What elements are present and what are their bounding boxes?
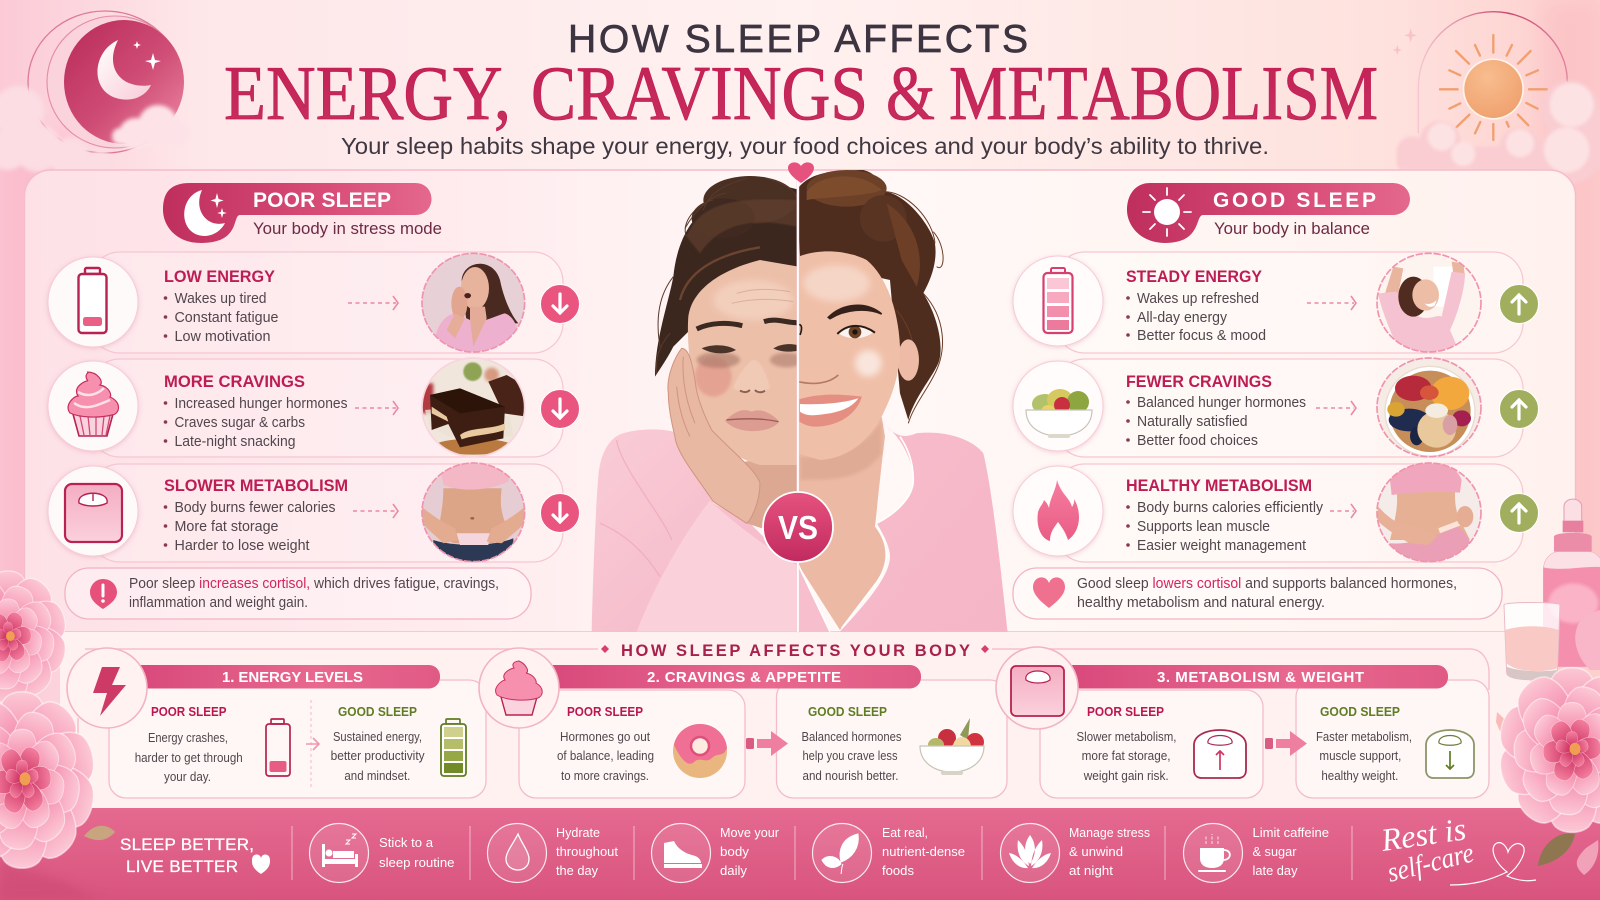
icon: bathroom scale: [65, 484, 122, 542]
card: fewer cravings: FEWER CRAVINGS: [1126, 373, 1272, 391]
tip: hydrate: [488, 824, 618, 882]
right portrait half: good sleep: [797, 170, 1008, 632]
ring: photo border: [1377, 463, 1481, 562]
text: energy poor: [135, 731, 243, 784]
list: more cravings: Late-night snacking: [174, 434, 296, 450]
photos: good sleep row images: [1373, 250, 1487, 565]
icon: lotus: [1009, 835, 1051, 868]
text: metabolism poor: [1076, 730, 1176, 783]
text: cortisol balance line two: healthy metabolism and natural energy.: [1077, 595, 1325, 611]
label: good sleep: GOOD SLEEP: [1320, 704, 1400, 719]
decoration: left peonies: [0, 570, 115, 900]
card: more cravings: MORE CRAVINGS: [164, 373, 305, 391]
text: energy good: [331, 730, 425, 783]
list: more cravings: [164, 396, 348, 450]
list: low energy: [164, 291, 278, 345]
footer slogan: SLEEP BETTER,: [120, 835, 254, 854]
card: slower metabolism: SLOWER METABOLISM: [164, 477, 348, 495]
panel: main comparison: [24, 170, 1576, 632]
list: low energy: Constant fatigue: [174, 310, 278, 326]
photo: woman yawning: [422, 254, 524, 352]
icon: leaves: [822, 834, 858, 874]
list: fewer cravings: [1126, 395, 1306, 449]
decoration: moon badge with clouds: [28, 11, 191, 153]
subtitle: Your sleep habits shape your energy, your food choices and your body’s ability to thrive.: [341, 133, 1269, 159]
text: cortisol line two: inflammation and weight gain.: [129, 595, 308, 611]
card: fewer cravings: [1013, 359, 1538, 457]
arrow: dashed: [1307, 296, 1356, 310]
label: good sleep: GOOD SLEEP: [808, 704, 887, 719]
icon: low battery small: [266, 719, 290, 776]
tip: move your body: [652, 824, 780, 882]
tip: hydrate: Hydrate: [556, 825, 600, 840]
text: cravings poor: of balance, leading: [557, 749, 654, 763]
text: cravings poor: Hormones go out: [560, 730, 650, 744]
list: healthy metabolism: [1126, 500, 1324, 554]
title: energy, cravings & metabolism: [224, 50, 1378, 136]
arrow: dashed: [353, 504, 398, 518]
decoration: left clouds: [0, 86, 114, 179]
badge: down arrow: [540, 284, 580, 324]
list: low energy: Low motivation: [174, 329, 270, 345]
icon: sun rays: [1440, 35, 1547, 140]
list: slower metabolism: Body burns fewer calories: [174, 500, 336, 516]
ring: photo border: [1377, 253, 1481, 352]
badge: VS: VS: [778, 509, 818, 546]
script: rest is self-care: [1378, 810, 1536, 889]
list: steady energy: [1126, 291, 1266, 344]
arrow: poor to good: [746, 731, 788, 756]
label: poor sleep: POOR SLEEP: [1087, 704, 1164, 719]
badge: up arrow: [1500, 390, 1538, 428]
icon: cupcake in circle: [479, 648, 559, 728]
photo: toned midriff with tape: [1377, 463, 1480, 562]
callout: cortisol decreases: [1013, 568, 1502, 619]
decoration: sun in arch with clouds: [1392, 12, 1600, 184]
badge: down arrow: [540, 494, 580, 532]
list: slower metabolism: More fat storage: [174, 519, 278, 535]
heading: good sleep badge: Your body in balance: [1214, 219, 1370, 238]
arrow: poor to good: [1265, 731, 1307, 756]
tip: move your body: body: [720, 844, 750, 859]
pill: energy levels: 1. ENERGY LEVELS: [222, 669, 363, 686]
card: low energy: LOW ENERGY: [164, 268, 275, 286]
icon: salad bowl: [1026, 389, 1092, 438]
footer slogan: [120, 835, 270, 876]
tip: sleep routine: [310, 824, 454, 882]
tip: eat real foods: [812, 824, 965, 882]
icon: heart: [1033, 577, 1065, 608]
card: healthy metabolism: HEALTHY METABOLISM: [1126, 477, 1312, 495]
tip: hydrate: throughout: [556, 844, 618, 859]
text: cravings good: help you crave less: [802, 749, 898, 763]
tip: hydrate: the day: [556, 863, 598, 878]
icon: sneaker: [664, 841, 702, 868]
central portrait: tired vs refreshed: [592, 162, 1008, 632]
title: energy, cravings & metabolism: METABOLISM: [949, 50, 1378, 136]
section: metabolism and weight: [996, 647, 1489, 798]
icon: white heart: [252, 854, 270, 874]
tip: manage stress: Manage stress: [1069, 825, 1150, 840]
clouds under sun: [1397, 81, 1600, 184]
icon: outline heart: [1450, 843, 1536, 885]
arrow: dashed: [355, 401, 398, 415]
tip: sleep routine: sleep routine: [379, 855, 454, 870]
tip: eat real foods: Eat real,: [882, 825, 928, 840]
icon: cupcake: [68, 372, 118, 436]
icon: lightning bolt in circle: [67, 648, 147, 728]
icon: low battery: [78, 268, 106, 333]
badge: VS: [763, 492, 833, 562]
text: energy good: and mindset.: [344, 769, 410, 783]
icon: scale up: [1194, 730, 1246, 778]
text: metabolism good: muscle support,: [1319, 749, 1401, 763]
icon: crescent moon badge: [184, 190, 225, 236]
heading: how sleep affects your body: [78, 642, 1489, 808]
icon: water drop: [506, 834, 529, 870]
card: steady energy: STEADY ENERGY: [1126, 268, 1262, 286]
water glass: [1504, 602, 1560, 680]
text: metabolism poor: weight gain risk.: [1083, 769, 1169, 783]
text: metabolism good: Faster metabolism,: [1316, 730, 1412, 744]
tip: manage stress: [1000, 824, 1150, 882]
list: more cravings: Increased hunger hormones: [174, 396, 348, 412]
section: cravings and appetite: [479, 648, 1007, 798]
text: cravings good: Balanced hormones: [802, 730, 902, 744]
text: cortisol balance: Good sleep lowers cortisol and supports balanced hormones,: [1077, 576, 1457, 592]
text: cravings poor: to more cravings.: [561, 769, 649, 783]
text: energy good: Sustained energy,: [333, 730, 422, 744]
footer band: [0, 808, 1600, 900]
pill: metabolism: [1060, 665, 1448, 688]
title: energy, cravings & metabolism: &: [886, 50, 935, 136]
tip: limit caffeine: [1184, 824, 1329, 882]
tip: limit caffeine: & sugar: [1252, 844, 1297, 859]
card: slower metabolism: [48, 464, 580, 562]
text: metabolism poor: more fat storage,: [1082, 749, 1171, 763]
decoration: right peony: [1494, 610, 1600, 875]
list: steady energy: All-day energy: [1137, 310, 1228, 326]
label: poor sleep: POOR SLEEP: [151, 704, 227, 719]
ring: photo border: [422, 358, 525, 457]
card: low energy: [48, 252, 580, 353]
icon: sun: [1463, 58, 1524, 120]
card: steady energy: [1013, 252, 1538, 353]
text: metabolism poor: Slower metabolism,: [1076, 730, 1176, 744]
list: slower metabolism: Harder to lose weight: [174, 538, 310, 554]
icon: sun badge: [1143, 188, 1191, 236]
arrow: dashed: [348, 296, 398, 310]
card: more cravings: [48, 359, 580, 457]
icon: scale down: [1426, 730, 1474, 778]
card: healthy metabolism: [1013, 464, 1538, 562]
heading: how sleep affects your body: HOW SLEEP AFFECTS YOUR BODY: [621, 642, 970, 660]
text: metabolism good: healthy weight.: [1321, 769, 1398, 783]
icon: full battery: [1044, 268, 1072, 333]
clouds beside moon: [112, 105, 191, 150]
heading: poor sleep badge: Your body in stress mode: [253, 219, 442, 238]
panel: lower section background: [60, 632, 1530, 808]
list: healthy metabolism: Body burns calories efficiently: [1137, 500, 1324, 516]
icon: flame: [1038, 480, 1079, 541]
tip: limit caffeine: Limit caffeine: [1252, 825, 1329, 840]
bottle: [1543, 499, 1600, 667]
pill: cravings: 2. CRAVINGS & APPETITE: [647, 669, 841, 686]
list: fewer cravings: Balanced hunger hormones: [1137, 395, 1306, 411]
arrow: dashed: [1316, 401, 1356, 415]
label: good sleep: GOOD SLEEP: [338, 704, 417, 719]
list: fewer cravings: Naturally satisfied: [1137, 414, 1248, 430]
icon: alert drop: [90, 579, 117, 609]
decorative bottle and glass: [1504, 499, 1600, 680]
bud: [1575, 610, 1600, 670]
pill: cravings: [540, 665, 921, 688]
divider: center line: [797, 176, 799, 632]
tip: manage stress: & unwind: [1069, 844, 1123, 859]
leaves: [1538, 833, 1575, 866]
pill: metabolism: 3. METABOLISM & WEIGHT: [1157, 669, 1364, 686]
icon: fruit bowl: [920, 718, 984, 775]
heading: poor sleep badge: [163, 183, 442, 243]
tip: move your body: Move your: [720, 825, 780, 840]
label: poor sleep: POOR SLEEP: [567, 704, 643, 719]
icon: full green battery: [441, 719, 466, 776]
title: how sleep affects: HOW SLEEP AFFECTS: [568, 18, 1028, 61]
photo: woman stretching: [1378, 262, 1465, 352]
heading: poor sleep badge: POOR SLEEP: [253, 189, 391, 212]
icon: scale in circle: [996, 647, 1078, 729]
text: cravings good: [802, 730, 902, 783]
icon: donut: [673, 724, 727, 778]
badge: down arrow: [540, 390, 580, 428]
list: low energy: Wakes up tired: [174, 291, 266, 307]
ring: photo border: [422, 253, 525, 352]
photo: midriff with jeans: [422, 463, 525, 562]
left portrait half: poor sleep: [592, 176, 803, 632]
heading: good sleep badge: GOOD SLEEP: [1213, 189, 1376, 212]
ring: photo border: [1377, 358, 1481, 457]
text: cravings good: and nourish better.: [802, 769, 898, 783]
text: energy poor: harder to get through: [135, 751, 243, 765]
tip: sleep routine: Stick to a: [379, 835, 434, 850]
script: rest is self-care: Rest is: [1378, 810, 1468, 858]
text: cortisol: Poor sleep increases cortisol, which drives fatigue, cravings,: [129, 576, 499, 592]
badge: up arrow: [1500, 494, 1538, 532]
photos: poor sleep row images: [420, 250, 530, 565]
text: energy poor: your day.: [164, 770, 211, 784]
list: slower metabolism: [164, 500, 336, 554]
list: more cravings: Craves sugar & carbs: [174, 415, 305, 431]
tip: limit caffeine: late day: [1252, 863, 1298, 878]
footer slogan: LIVE BETTER: [126, 857, 238, 876]
photo: chocolate cake: [422, 359, 524, 456]
title: energy, cravings & metabolism: CRAVINGS: [531, 50, 868, 136]
title: energy, cravings & metabolism: ENERGY,: [224, 50, 511, 136]
tip: manage stress: at night: [1069, 863, 1113, 878]
icon: bed: [322, 834, 358, 867]
tip: move your body: daily: [720, 863, 747, 878]
icon: coffee cup: [1198, 834, 1230, 872]
section: energy levels: [67, 648, 486, 798]
badge: up arrow: [1500, 284, 1538, 324]
tip: eat real foods: nutrient-dense: [882, 844, 965, 859]
leaf: [84, 826, 115, 840]
ring: photo border: [422, 463, 525, 562]
pill: energy levels: [130, 665, 440, 688]
icon: top heart: [788, 162, 814, 183]
list: steady energy: Better focus & mood: [1137, 328, 1266, 344]
text: energy good: better productivity: [331, 749, 425, 763]
list: healthy metabolism: Supports lean muscle: [1137, 519, 1270, 535]
photo: fruit and granola bowl: [1377, 358, 1481, 457]
text: energy poor: Energy crashes,: [148, 731, 228, 745]
script: rest is self-care: self-care: [1384, 837, 1477, 889]
icon: crescent moon: [97, 40, 151, 100]
heading: good sleep badge: [1127, 183, 1410, 243]
text: metabolism good: [1316, 730, 1412, 783]
callout: cortisol increases: [65, 568, 531, 619]
arrow: dashed: [1330, 504, 1356, 518]
footer dividers: [292, 826, 1352, 880]
arrow: small: [306, 738, 319, 750]
tip: eat real foods: foods: [882, 863, 914, 878]
text: cravings poor: [557, 730, 654, 783]
list: fewer cravings: Better food choices: [1137, 433, 1258, 449]
icon: moon stars: [133, 41, 161, 70]
list: steady energy: Wakes up refreshed: [1137, 291, 1259, 307]
list: healthy metabolism: Easier weight management: [1137, 538, 1306, 554]
